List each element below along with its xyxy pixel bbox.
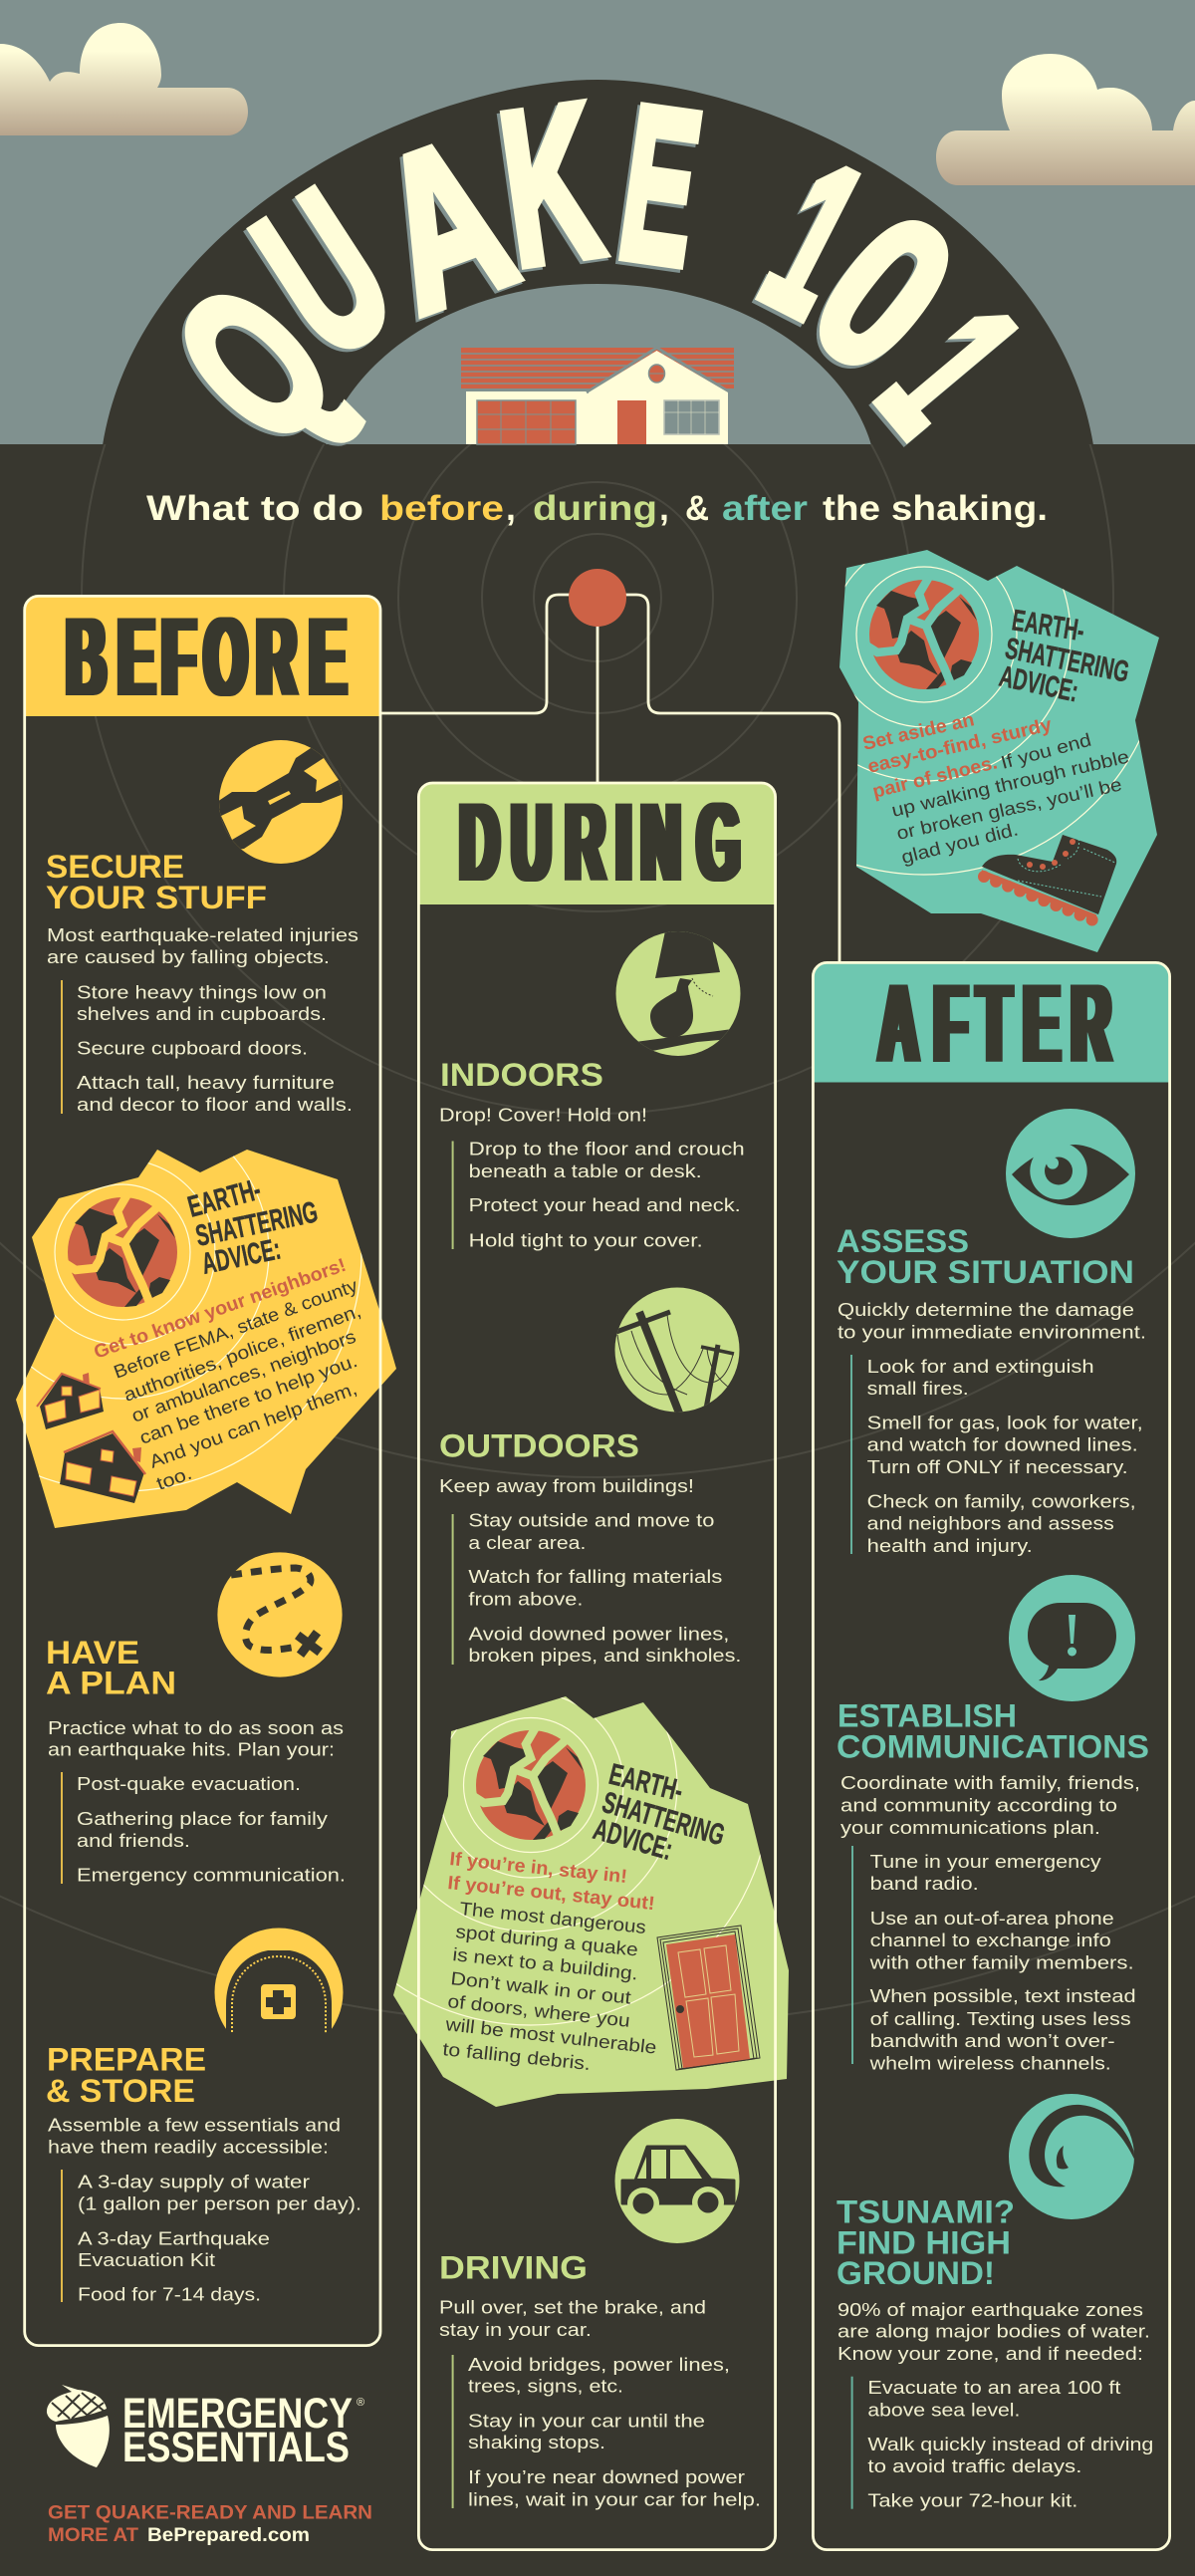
section: assess your situation: Check on family, coworkers, [867,1491,1136,1512]
section: establish communications: ESTABLISH [837,1698,1017,1734]
section: establish communications: your communications plan. [840,1817,1100,1838]
callout: earth-shattering advice (after): ADVICE: [997,660,1081,708]
section: indoors: beneath a table or desk. [469,1160,702,1181]
section: assess your situation: Look for and extinguish [867,1356,1094,1377]
callout: earth-shattering advice (after): If you end [999,729,1093,773]
title: QUAKE 101: K [485,60,610,315]
call to action: GET QUAKE-READY AND LEARN [48,2502,372,2524]
icon: tsunami wave [1009,2094,1137,2219]
callout: earth-shattering advice (after): glad you did. [899,818,1020,868]
icon: large house [60,1431,145,1503]
section: outdoors: a clear area. [468,1532,586,1553]
icon: door [657,1926,760,2070]
subtitle: , [506,488,516,528]
heading: AFTER: AFTER [878,960,1110,1086]
callout: earth-shattering advice (before): or ambulances, neighbors [128,1326,358,1426]
section: tsunami: TSUNAMI? [836,2194,1015,2230]
section: prepare and store: (1 gallon per person per day). [78,2193,361,2213]
icon: car [615,2119,739,2243]
section: tsunami: above sea level. [867,2400,1020,2421]
section: outdoors [439,1428,741,1666]
callout: earth-shattering advice (during): The most dangerous [459,1898,647,1937]
callout: earth-shattering advice (during): is next to a building. [452,1943,639,1984]
callout: earth-shattering advice (before): And you can help them, [146,1378,359,1472]
callout: earth-shattering advice (after): pair of shoes. [870,752,1000,803]
callout: earth-shattering advice (during): ADVICE: [590,1813,676,1867]
section: have a plan: HAVE [46,1635,139,1671]
callout: earth-shattering advice (after): up walking through rubble [889,746,1131,821]
section: tsunami: to avoid traffic delays. [867,2455,1081,2476]
section: driving [439,2250,761,2510]
sky background [0,0,1195,444]
section: tsunami: Know your zone, and if needed: [837,2343,1143,2364]
callout: earth-shattering advice (during): SHATTERING [598,1786,728,1852]
section: establish communications: band radio. [870,1873,979,1894]
section: assess your situation: small fires. [867,1378,969,1399]
callout: earth-shattering advice (after): EARTH- [1010,604,1086,647]
callout: earth-shattering advice (after): easy-to-find, sturdy [865,714,1055,778]
title: QUAKE 101: K [488,57,613,312]
icon: eye [1006,1109,1135,1238]
section: assess your situation [836,1223,1146,1556]
section: secure your stuff: Attach tall, heavy furniture [77,1072,335,1093]
subtitle: What to do [146,488,363,528]
icon: small house [37,1373,104,1429]
section: establish communications [836,1698,1149,2074]
section: outdoors: from above. [468,1589,583,1610]
section: have a plan: Emergency communication. [77,1865,346,1886]
title: QUAKE 101: A [348,93,536,362]
section: assess your situation: YOUR SITUATION [836,1254,1134,1290]
section: establish communications: Coordinate with family, friends, [840,1772,1140,1793]
subtitle: during [533,488,657,528]
icon: speech bubble [1009,1575,1135,1701]
callout: before fill [16,1150,396,1528]
cloud right [936,54,1195,185]
icon: emergency backpack [215,1929,343,2032]
section: establish communications: whelm wireless channels. [869,2053,1111,2074]
title: QUAKE 101: Q [129,245,373,489]
section: driving: shaking stops. [468,2432,605,2452]
title: QUAKE 101: A [351,90,539,359]
section: secure your stuff: Most earthquake-related injuries [47,924,358,945]
panel: during [418,783,776,2550]
callout: earth-shattering advice (before): SHATTERING [193,1195,321,1253]
callout: earth-shattering advice (before): too. [153,1462,194,1494]
section: secure your stuff: and decor to floor and walls. [77,1094,353,1115]
title: QUAKE 101: Q [132,242,376,486]
callout: earth-shattering advice (before): Get to know your neighbors! [92,1255,349,1364]
callout: earth-shattering advice (after): or broken glass, you’ll be [894,773,1123,844]
section: assess your situation: and neighbors and assess [867,1513,1114,1534]
section: driving: lines, wait in your car for help. [468,2489,761,2510]
section: tsunami: 90% of major earthquake zones [837,2299,1143,2320]
callout: earth-shattering advice (after): SHATTERING [1003,633,1132,689]
callout: during fill [393,1696,789,2107]
section: have a plan: Post-quake evacuation. [77,1773,301,1794]
section: establish communications: Use an out-of-area phone [870,1908,1114,1929]
section: have a plan: an earthquake hits. Plan your: [48,1739,335,1760]
callout: earth-shattering advice (before): Before FEMA, state & county [111,1274,360,1383]
section: tsunami: Take your 72-hour kit. [867,2490,1077,2511]
callout: earth-shattering advice (before) [31,1156,362,1503]
title: QUAKE 101: U [216,148,426,403]
section: tsunami: GROUND! [836,2255,995,2291]
section: assess your situation: Quickly determine the damage [837,1299,1134,1320]
section: assess your situation: ASSESS [836,1223,969,1259]
section: prepare and store: PREPARE [47,2042,206,2078]
section: establish communications: bandwith and won’t over- [870,2030,1115,2051]
title: QUAKE 101: 1 [836,268,1063,471]
section: tsunami: FIND HIGH [836,2225,1011,2261]
title: QUAKE 101: 1 [834,271,1060,474]
section: tsunami: Evacuate to an area 100 ft [867,2377,1120,2398]
section: prepare and store: Evacuation Kit [78,2249,215,2270]
callout: earth-shattering advice (during): to falling debris. [442,2038,592,2074]
title: QUAKE 101: E [607,59,713,312]
callout: earth-shattering advice (before): can be there to help you. [136,1350,359,1448]
section: driving: Stay in your car until the [468,2411,705,2432]
section: indoors: INDOORS [440,1057,603,1093]
section: assess your situation: health and injury. [867,1535,1033,1556]
call to action: BePrepared.com [147,2524,310,2546]
section: prepare and store: & STORE [46,2073,195,2109]
section: outdoors: Avoid downed power lines, [468,1624,729,1645]
section: driving: If you’re near downed power [468,2466,745,2487]
section: prepare and store: Assemble a few essentials and [48,2115,341,2136]
section: have a plan: Gathering place for family [77,1808,329,1829]
section: establish communications: COMMUNICATIONS [836,1729,1149,1765]
subtitle: , [659,488,669,528]
section: prepare and store: A 3-day supply of water [78,2172,310,2192]
section: tsunami: are along major bodies of water. [837,2321,1150,2342]
icon: lamp [615,926,747,1056]
section: assess your situation: Smell for gas, look for water, [867,1413,1143,1432]
title: QUAKE 101: 1 [732,117,896,362]
subtitle [146,488,1048,528]
callout: earth-shattering advice (during): If you’re in, stay in! [448,1849,628,1888]
section: have a plan [46,1635,346,1886]
callout: earth-shattering advice (during): will be most vulnerable [443,2013,658,2058]
section: assess your situation: and watch for downed lines. [867,1434,1138,1455]
icon: broken chain [219,740,343,864]
section: secure your stuff: SECURE [46,849,184,885]
section: driving: Avoid bridges, power lines, [468,2354,730,2375]
section: secure your stuff [46,849,358,1115]
logo: Emergency Essentials [47,2385,364,2471]
panel: before [25,596,380,2346]
heading: BEFORE: BEFORE [67,594,346,719]
call to action: MORE AT [48,2524,138,2546]
section: have a plan: and friends. [77,1830,190,1851]
icon: house [461,348,734,444]
section: outdoors: broken pipes, and sinkholes. [468,1645,741,1666]
subtitle: the shaking. [823,488,1048,528]
section: prepare and store: have them readily accessible: [48,2137,329,2158]
panel: after [813,962,1170,2550]
title: QUAKE 101: U [219,145,429,400]
icon: acorn [47,2385,110,2467]
connector lines [380,595,839,962]
section: tsunami [836,2194,1153,2511]
callout: earth-shattering advice (during): If you’re out, stay out! [446,1873,656,1915]
subtitle: before [379,488,504,528]
section: indoors: Drop to the floor and crouch [469,1139,745,1159]
section: assess your situation: Turn off ONLY if necessary. [867,1456,1128,1477]
section: have a plan: A PLAN [46,1666,176,1701]
section: driving: stay in your car. [439,2319,592,2340]
icon: boot [981,835,1116,920]
callout: earth-shattering advice (before): EARTH- [184,1173,264,1224]
section: driving: Pull over, set the brake, and [439,2297,706,2318]
callout: earth-shattering advice (during): of doors, where you [447,1990,631,2031]
section: outdoors: OUTDOORS [439,1428,639,1464]
callout: earth-shattering advice (after) [839,550,1159,952]
heading: DURING: DURING [460,779,740,904]
title: QUAKE 101: 0 [773,168,996,417]
title: QUAKE 101 [129,57,1063,489]
section: secure your stuff: YOUR STUFF [46,880,267,915]
section: driving: DRIVING [439,2250,588,2286]
section: establish communications: channel to exchange info [870,1930,1111,1950]
subtitle: after [722,488,808,528]
section: indoors: Drop! Cover! Hold on! [439,1105,647,1126]
logo: Emergency Essentials: EMERGENCY [122,2390,353,2438]
callout: earth-shattering advice (before): authorities, police, firemen, [120,1300,363,1406]
section: assess your situation: to your immediate environment. [837,1321,1146,1343]
section: tsunami: Walk quickly instead of driving [867,2434,1153,2454]
subtitle: & [685,488,709,528]
call to action [48,2502,372,2546]
section: establish communications: with other family members. [869,1952,1134,1973]
section: driving: trees, signs, etc. [468,2376,623,2397]
section: secure your stuff: are caused by falling objects. [47,946,330,967]
title: QUAKE 101: E [604,62,710,315]
section: indoors: Hold tight to your cover. [469,1229,703,1251]
section: indoors: Protect your head and neck. [469,1194,741,1215]
icon: treasure map route [217,1552,343,1677]
callout: earth-shattering advice (after): Set aside an [860,709,976,755]
callout: earth-shattering advice (during): Don’t walk in or out [450,1967,632,2008]
section: prepare and store: Food for 7-14 days. [78,2283,261,2305]
section: outdoors: Watch for falling materials [468,1566,722,1587]
callout: earth-shattering advice (during) [396,1697,761,2071]
section: establish communications: Tune in your emergency [870,1851,1102,1872]
icon: downed power lines [615,1287,742,1416]
epicenter dot [569,569,626,627]
section: outdoors: Keep away from buildings! [439,1475,694,1496]
seismic rings [0,444,1195,2015]
section: establish communications: of calling. Texting uses less [870,2008,1131,2029]
callout: earth-shattering advice (during): spot during a quake [455,1921,639,1960]
section: establish communications: and community according to [840,1795,1117,1816]
title: QUAKE 101: 0 [770,171,993,420]
cloud left [0,23,248,135]
section: outdoors: Stay outside and move to [468,1510,714,1531]
section: secure your stuff: shelves and in cupboards. [77,1003,327,1024]
section: prepare and store: A 3-day Earthquake [78,2227,270,2249]
logo: Emergency Essentials: ® [357,2397,364,2409]
section: prepare and store [46,2042,361,2305]
section: secure your stuff: Secure cupboard doors. [77,1038,308,1059]
section: have a plan: Practice what to do as soon as [48,1717,344,1738]
section: secure your stuff: Store heavy things low on [77,982,327,1002]
section: indoors [439,1057,745,1251]
callout: earth-shattering advice (before): ADVICE: [199,1232,284,1281]
section: establish communications: When possible, text instead [870,1985,1136,2006]
logo: Emergency Essentials: ESSENTIALS [122,2424,350,2471]
callout: earth-shattering advice (during): EARTH- [605,1758,686,1808]
title: QUAKE 101: 1 [729,120,893,365]
